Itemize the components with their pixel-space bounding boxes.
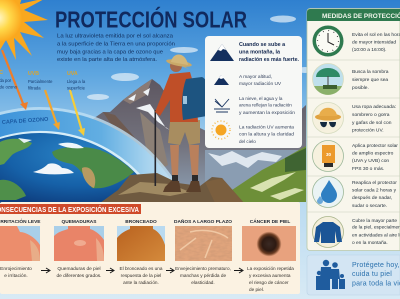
card: cáncer de piel: y excesiva aumenta (249, 273, 291, 278)
text: protect: cuida tu piel (352, 271, 392, 278)
text: hours: (10:00 a 16:00). (352, 47, 387, 53)
hiker (154, 54, 208, 192)
text: sun (239, 124, 294, 144)
text: sunscreen: de amplio espectro (352, 150, 394, 156)
icon: small mountain (214, 75, 229, 85)
icon: parasol (312, 64, 344, 95)
card: cáncer de piel (242, 218, 296, 292)
text: reapply: solar cada 2 horas y (352, 188, 397, 194)
card: irritación leve: IRRITACIÓN LEVE (0, 217, 41, 225)
heading: altitude: una montaña, la (239, 50, 281, 56)
text: reapply: Reaplica el protector (352, 180, 397, 186)
arrow: UVA (70, 90, 82, 131)
UV labels: filtrada (28, 86, 41, 90)
backpack (182, 77, 208, 120)
panel: consequences (0, 202, 300, 294)
icon: clock (312, 26, 344, 56)
heading: altitude: radiación es más fuerte. (239, 57, 299, 63)
arrowhead: UVB (53, 122, 60, 130)
UV labels: Llega a la (67, 79, 86, 84)
text: clothing: protección UV. (352, 128, 384, 134)
heading: altitude (239, 42, 299, 63)
cloud on globe (33, 163, 74, 174)
text: altitude: A mayor altitud, (239, 74, 272, 80)
icon: hat and sunglasses (312, 102, 344, 134)
intro text: La luz ultravioleta emitida por el sol alcanza (57, 34, 174, 40)
heading: altitude: Cuando se sube a (239, 42, 286, 48)
text: sun: del cielo (239, 139, 256, 144)
card: cáncer de piel: de piel. (249, 287, 264, 292)
card: daños a largo plazo: DAÑOS A LARGO PLAZO (174, 218, 232, 225)
panel: altitude info (205, 36, 302, 148)
UV labels: UVB (28, 71, 39, 77)
text: clothing (352, 104, 396, 134)
text: reflection: La nieve, el agua y la (239, 96, 283, 101)
icon: sunscreen (312, 140, 344, 172)
text: shade (352, 69, 389, 91)
intro text: existe en la parte alta de la atmósfera. (57, 57, 158, 63)
text: altitude (239, 74, 282, 87)
panel: protective measures (307, 8, 400, 250)
card: daños a largo plazo: elasticidad. (191, 280, 215, 285)
jacket (155, 72, 198, 122)
card: daños a largo plazo: Envejecimiento prematuro, (175, 266, 231, 271)
text: sun: La radiación UV aumenta (239, 124, 294, 130)
shorts (168, 120, 200, 145)
clouds (87, 16, 313, 100)
card: quemaduras: Quemaduras de piel (57, 266, 101, 272)
heading banner (0, 204, 141, 214)
card: cáncer de piel: CÁNCER DE PIEL (250, 218, 290, 225)
text: reapply: sudar o secarte. (352, 203, 387, 209)
boots (163, 181, 181, 192)
text: sun: con la altura y la claridad (239, 132, 294, 136)
heading (307, 9, 400, 21)
UV labels: Parcialmente (28, 79, 53, 84)
arrow (106, 268, 114, 273)
trekking pole (154, 110, 156, 186)
sun (0, 0, 48, 60)
card: cáncer de piel: La exposición repetida (247, 266, 294, 271)
title: PROTECCIÓN SOLAR (55, 6, 247, 32)
callout: protect (307, 255, 400, 295)
text: shade: posible. (352, 85, 369, 91)
label: capa de ozono: CAPA DE OZONO (2, 117, 49, 126)
arrowhead: UVA (78, 128, 85, 136)
text: reflection: y aumentan la exposición (239, 110, 295, 115)
arrow: UVB (45, 90, 57, 125)
card: quemaduras: QUEMADURAS (62, 219, 97, 225)
intro text: muy baja gracias a la capa de ozono que (57, 50, 163, 56)
text: reflection (239, 96, 295, 115)
text: reapply (352, 180, 397, 209)
sun rays (0, 0, 48, 60)
card: bronceado: respuesta de la piel (121, 273, 161, 278)
text: clothing: Usa ropa adecuada: (352, 104, 396, 110)
card: cáncer de piel: el riesgo de cáncer (249, 280, 289, 285)
text: shade: Busca la sombra (352, 69, 389, 75)
text: reflection: arena reflejan la radiación (239, 102, 292, 108)
text: sunscreen (352, 143, 398, 172)
globe (0, 133, 158, 203)
earth with ozone layer (0, 107, 187, 203)
card: quemaduras: de diferentes grados. (56, 273, 102, 279)
card: bronceado: BRONCEADO (125, 219, 157, 225)
card: bronceado: ante la radiación. (123, 280, 159, 285)
text: shade: siempre que sea (352, 77, 388, 83)
card: bronceado (117, 219, 165, 285)
text: sunscreen: Aplica protector solar (352, 143, 398, 149)
UV labels (0, 70, 86, 90)
intro text: a la superficie de la Tierra en una proporción (57, 42, 175, 48)
text: hours (352, 32, 400, 53)
text: reapply: después de nadar, (352, 195, 392, 201)
arrowhead: UVC (20, 102, 28, 110)
text: sunscreen: (UVA y UVB) con (352, 158, 389, 164)
icon: reflection (214, 99, 230, 112)
card: irritación leve: e irritación. (4, 273, 28, 279)
card: daños a largo plazo: manchas y pérdida de (180, 273, 226, 278)
hat (167, 61, 190, 70)
text: clothing: y gafas de sol con (352, 120, 392, 126)
card: daños a largo plazo (174, 218, 232, 285)
UV labels: superficie (67, 86, 86, 90)
arrow (41, 268, 50, 273)
text: clothing: sombrero o gorra (352, 112, 390, 118)
legs (170, 145, 179, 176)
UV labels: UVA (67, 71, 78, 77)
head (170, 60, 182, 72)
text: sunscreen: FPS 30 o más. (352, 166, 384, 172)
card: irritación leve: Enrojecimiento (0, 266, 32, 272)
ozone layer band (0, 107, 187, 203)
text: altitude: mayor radiación UV (239, 81, 282, 87)
arrow: UVC (2, 50, 24, 106)
intro text (57, 34, 175, 63)
text: cover (352, 218, 400, 246)
text: protect: Protégete hoy, (352, 262, 400, 269)
icon: family (316, 260, 345, 290)
icon: water drop (312, 176, 344, 208)
card: bronceado: El bronceado es una (119, 266, 163, 271)
arrow (166, 268, 174, 273)
arrow (234, 268, 243, 273)
card: irritación leve (0, 217, 41, 279)
rocky ground (100, 173, 244, 203)
background mountains (90, 79, 306, 202)
text: cover: o en la montaña. (352, 240, 388, 246)
icon: sun (212, 121, 230, 139)
icon: large mountain (210, 44, 234, 61)
card: quemaduras (54, 219, 104, 279)
text: cover: Cubre la mayor parte (352, 218, 397, 224)
icon: long sleeve shirt (312, 216, 344, 248)
text: hours: de mayor intensidad (352, 40, 396, 46)
text: protect (352, 262, 400, 288)
icon: sunscreen: 30 (326, 152, 331, 157)
